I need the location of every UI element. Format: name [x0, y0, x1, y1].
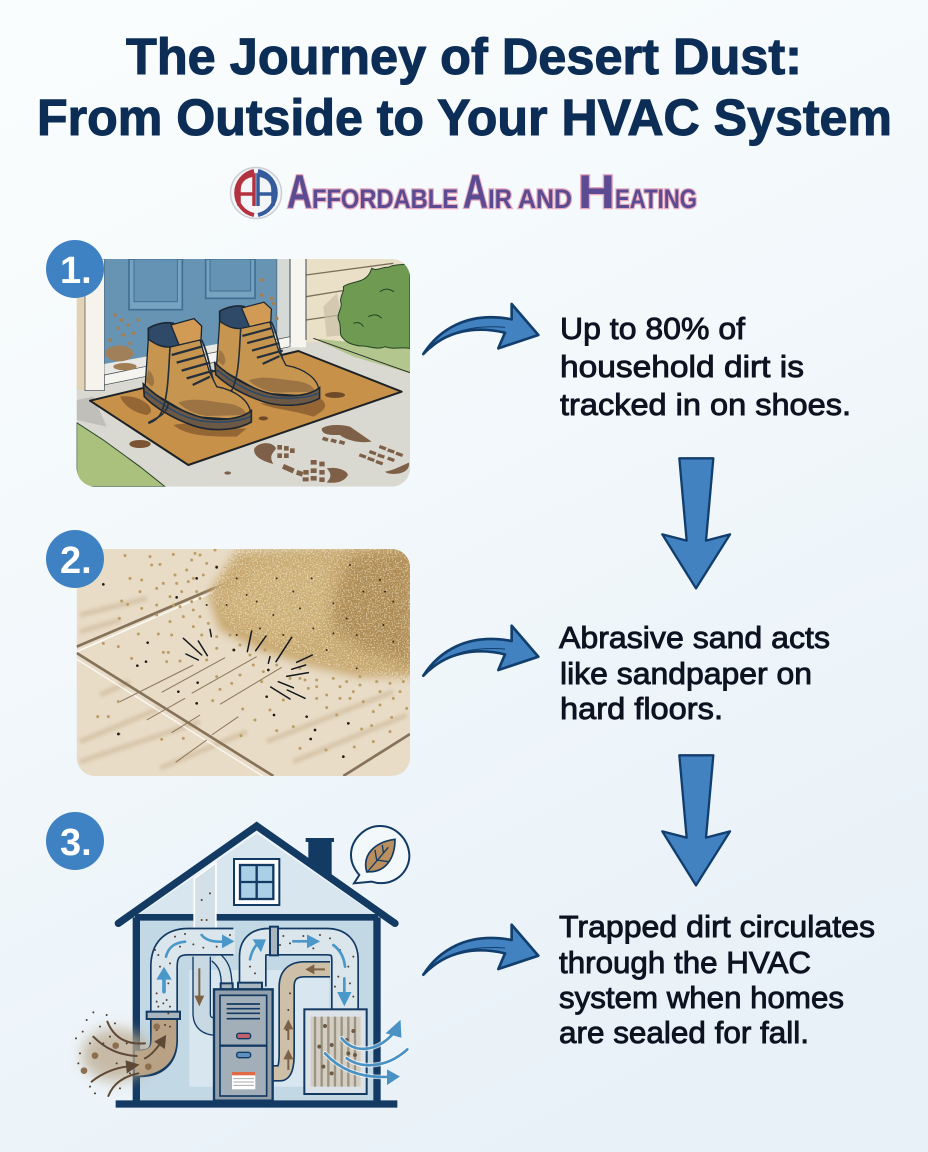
title: From Outside to Your HVAC System — [37, 89, 892, 146]
impact marks — [183, 629, 312, 699]
wood grain — [80, 598, 407, 768]
text block: step 1 — [560, 311, 851, 422]
logo wordmark: AND — [518, 184, 572, 214]
text block: step 2: Abrasive sand acts — [559, 620, 830, 655]
air filter — [304, 1009, 367, 1094]
title — [37, 28, 892, 146]
sand pile — [200, 545, 417, 682]
logo wordmark: IR — [488, 184, 512, 214]
panel 3: house HVAC cutaway illustration — [76, 826, 409, 1104]
roof and walls — [116, 826, 397, 1104]
arrow: down from text 2 to text 3 — [662, 755, 730, 885]
attic window — [234, 859, 279, 905]
boots — [143, 302, 320, 430]
step badge 1 — [46, 240, 104, 298]
text block: step 2: hard floors. — [560, 691, 723, 726]
furnace — [214, 989, 273, 1101]
logo wordmark: A — [463, 165, 488, 218]
mat shadow — [77, 397, 107, 427]
step badge 1: 1. — [60, 250, 92, 292]
outgoing air arrows — [325, 1023, 407, 1083]
step badge 3: 3. — [60, 822, 92, 864]
icon: leaf speech bubble — [351, 826, 409, 883]
text block: step 2 — [559, 620, 830, 726]
step badge 3 — [46, 812, 104, 870]
incoming dust cloud — [76, 1012, 165, 1096]
panel 1: boots on doormat illustration — [77, 259, 410, 487]
logo: Affordable Air and Heating — [230, 165, 697, 218]
scratches — [120, 657, 282, 762]
text block: step 1: Up to 80% of — [560, 311, 745, 346]
logo wordmark: FFORDABLE — [312, 184, 458, 214]
house interior — [137, 833, 378, 1103]
scattered grains — [98, 550, 407, 757]
grass — [77, 423, 165, 487]
door mat — [90, 351, 402, 465]
logo wordmark: EATING — [615, 184, 697, 214]
door — [104, 259, 290, 385]
arrow: step 1 to text — [423, 304, 538, 354]
step badge 2: 2. — [60, 540, 92, 582]
arrow: step 2 to text — [423, 626, 538, 676]
text block: step 1: household dirt is — [560, 349, 804, 384]
muddy footprints — [224, 425, 409, 483]
title: The Journey of Desert Dust: — [126, 28, 802, 85]
floor plank seams — [75, 580, 410, 782]
step badge 2 — [46, 530, 104, 588]
siding and trim — [77, 259, 410, 391]
panel 2: abrasive sand on wood floor illustration — [75, 545, 417, 782]
logo emblem — [230, 168, 282, 218]
text block: step 1: tracked in on shoes. — [560, 387, 851, 422]
text block: step 3: system when homes — [559, 980, 844, 1015]
text block: step 3: are sealed for fall. — [559, 1015, 809, 1050]
logo wordmark — [287, 165, 697, 218]
text block: step 3: through the HVAC — [559, 945, 811, 980]
attic duct — [194, 863, 216, 933]
bush — [313, 263, 410, 373]
logo wordmark: H — [578, 165, 615, 218]
brown return arrows — [196, 966, 325, 1070]
text block: step 3: Trapped dirt circulates — [559, 909, 875, 944]
arrow: down from text 1 to text 2 — [662, 458, 730, 588]
duct collars — [147, 927, 278, 1019]
arrow: step 3 to text — [423, 925, 538, 975]
chimney — [306, 838, 334, 877]
logo wordmark: A — [287, 165, 312, 218]
duct dust — [155, 893, 353, 1030]
ductwork — [135, 942, 345, 1073]
blue air flow arrows — [159, 935, 349, 1003]
text block: step 2: like sandpaper on — [560, 656, 812, 691]
text block: step 3 — [559, 909, 875, 1050]
